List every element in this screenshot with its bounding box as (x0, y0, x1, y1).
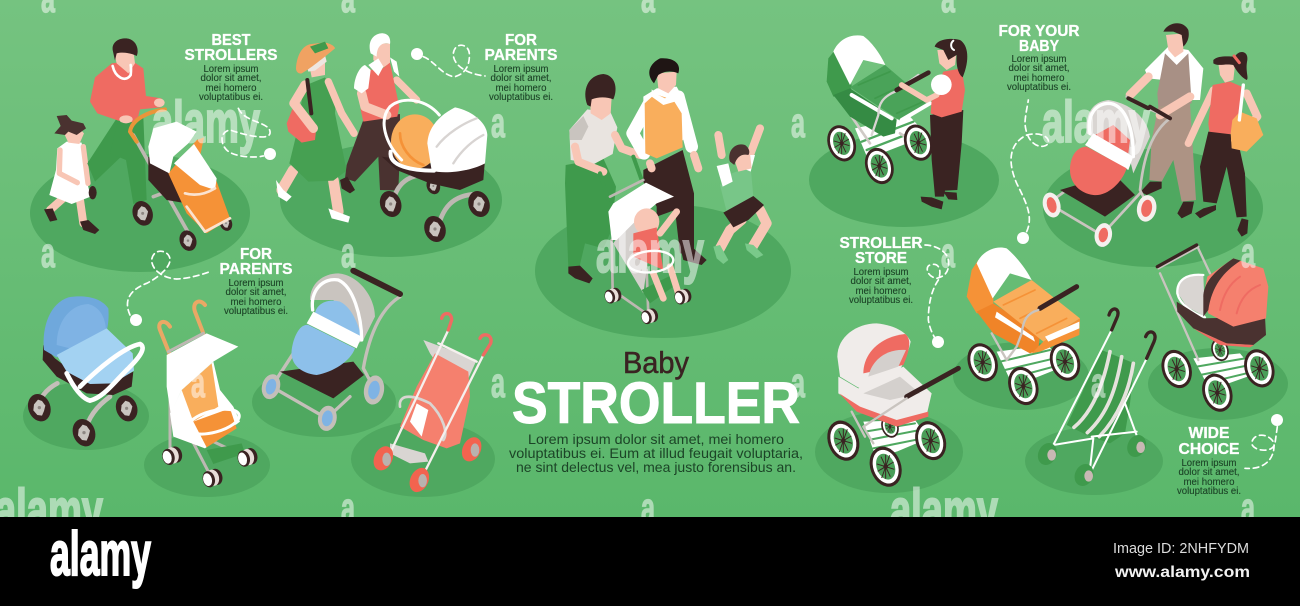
callout: stroller store: mei homero (856, 286, 907, 297)
intro text (509, 431, 803, 475)
woman (902, 39, 967, 209)
watermarks: a (791, 99, 805, 146)
watermarks: a (191, 359, 205, 406)
watermarks: alamy (1042, 90, 1150, 155)
callout: wide choice: WIDE (1188, 425, 1230, 442)
watermarks: a (341, 484, 355, 531)
watermarks: a (491, 99, 505, 146)
watermarks: a (341, 229, 355, 276)
callout: for your baby: dolor sit amet, (1008, 63, 1070, 74)
mother (1188, 52, 1263, 237)
watermarks: a (791, 359, 805, 406)
callout: for parents top: dolor sit amet, (490, 73, 552, 84)
callout: best strollers: Lorem ipsum (204, 64, 258, 75)
callout: wide choice (1177, 414, 1283, 497)
scene: coral umbrella stroller (370, 314, 491, 495)
callout: for your baby: mei homero (1014, 73, 1065, 84)
scene: salmon pram (1156, 245, 1280, 416)
callout: for parents top (411, 32, 558, 103)
callout: stroller store: STROLLER (840, 235, 923, 252)
callout: for your baby: voluptatibus ei. (1007, 82, 1071, 93)
title: baby stroller: STROLLER (512, 371, 800, 436)
callout: for parents left (127, 246, 293, 326)
callout: stroller store: STORE (855, 250, 907, 267)
callout: best strollers: BEST (212, 32, 251, 49)
stroller: white (600, 157, 693, 325)
title: baby stroller (512, 345, 800, 436)
callout: for parents top: Lorem ipsum (494, 64, 548, 75)
watermarks: a (941, 229, 955, 276)
stroller: coral (1040, 97, 1170, 248)
image id: Image ID: 2NHFYDM (1113, 540, 1249, 557)
callout: best strollers: dolor sit amet, (200, 73, 262, 84)
callout: wide choice: dolor sit amet, (1178, 467, 1240, 478)
pram: green (822, 35, 938, 188)
father (633, 58, 707, 265)
girl (44, 115, 99, 234)
father (1130, 23, 1203, 218)
callout: stroller store: dolor sit amet, (850, 276, 912, 287)
intro text: ne sint delectus vel, mea justo forensibus an. (516, 459, 796, 475)
callout: stroller store: Lorem ipsum (854, 267, 908, 278)
callout: best strollers: STROLLERS (184, 47, 278, 64)
callout: for parents top: PARENTS (484, 47, 558, 64)
callout: for parents top: FOR (505, 32, 537, 49)
watermarks: alamy (890, 478, 998, 543)
title: baby stroller: Baby (623, 345, 689, 380)
grandmother (276, 42, 354, 223)
footer bar (0, 517, 1300, 606)
callout: for your baby: BABY (1019, 38, 1059, 55)
callout: for parents left: FOR (240, 246, 272, 263)
intro text: Lorem ipsum dolor sit amet, mei homero (528, 431, 784, 447)
scene: blue pram (24, 296, 143, 450)
scene: parents, child and white stroller (565, 58, 767, 325)
callout: for parents left: mei homero (230, 297, 282, 308)
callout: wide choice: CHOICE (1178, 441, 1240, 458)
callout: for parents left: PARENTS (220, 261, 293, 278)
grandfather (340, 33, 417, 193)
callout: wide choice: Lorem ipsum (1182, 458, 1236, 469)
pram: white canopy (376, 100, 493, 245)
callout: best strollers: voluptatibus ei. (199, 92, 263, 103)
callout: stroller store: voluptatibus ei. (849, 295, 913, 306)
mother (87, 38, 165, 204)
callout: for your baby: Lorem ipsum (1012, 54, 1066, 65)
watermarks: a (1241, 484, 1255, 531)
scene: orange pram (962, 247, 1085, 409)
callout: for your baby (998, 23, 1080, 244)
watermarks: a (1091, 359, 1105, 406)
watermarks: alamy (596, 220, 704, 285)
callout: best strollers (184, 32, 278, 160)
callout: wide choice: mei homero (1184, 477, 1235, 488)
callout: for parents left: voluptatibus ei. (224, 306, 288, 317)
callout: best strollers: mei homero (206, 83, 257, 94)
watermarks: a (491, 359, 505, 406)
watermarks: alamy (152, 90, 260, 155)
callout: for parents left: dolor sit amet, (226, 287, 286, 298)
mother (565, 74, 640, 283)
callout: wide choice: voluptatibus ei. (1177, 486, 1241, 497)
watermarks: a (641, 484, 655, 531)
watermarks: a (1241, 229, 1255, 276)
stroller: orange (129, 109, 234, 253)
footer logo: alamy (50, 520, 151, 589)
child (713, 128, 767, 264)
ground shadows (23, 133, 1288, 497)
watermarks: a (41, 229, 55, 276)
scene: white pram (822, 323, 958, 491)
callout: for parents top: mei homero (496, 83, 547, 94)
scene: mother, girl and orange stroller (44, 38, 234, 253)
scene: parents with coral stroller (1040, 23, 1263, 248)
callout: stroller store (840, 235, 949, 348)
scene: grey and blue stroller (259, 271, 400, 432)
scene: grandparents and white pram (276, 33, 493, 245)
scene: orange and white stroller (159, 302, 259, 489)
intro text: voluptatibus ei. Eum at illud feugait voluptaria, (509, 445, 803, 461)
website: www.alamy.com (1114, 564, 1250, 581)
scene: green striped umbrella stroller (1034, 309, 1155, 489)
callout: for parents left: Lorem ipsum (228, 278, 284, 289)
callout: for your baby: FOR YOUR (998, 23, 1080, 40)
callout: for parents top: voluptatibus ei. (489, 92, 553, 103)
scene: woman with green pram (822, 35, 967, 209)
